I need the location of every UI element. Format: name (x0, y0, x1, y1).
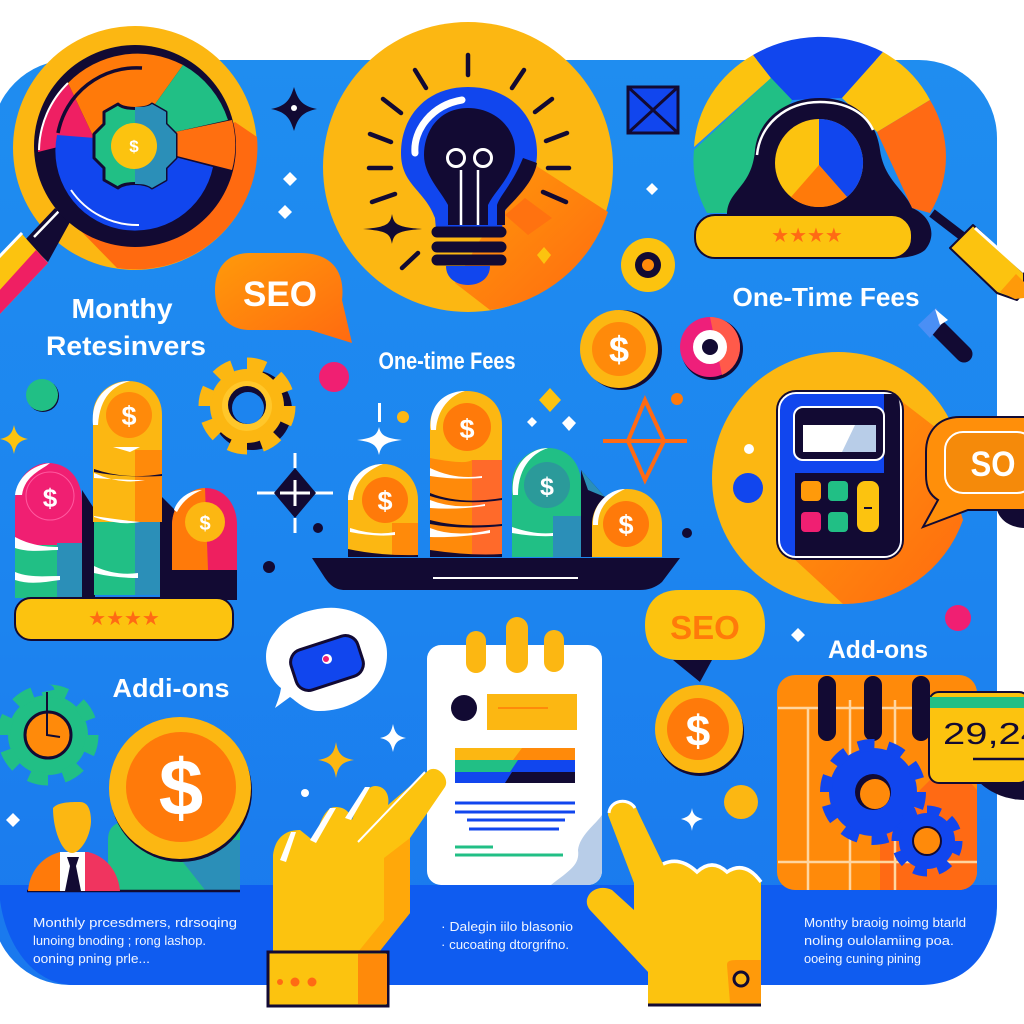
icon: crossed square (628, 87, 678, 133)
stack three (512, 448, 605, 557)
stack two (430, 391, 502, 557)
icon: coin near center (580, 310, 662, 390)
heading: Monthly Retainers: Retesinvers (46, 331, 206, 361)
bulb rays (369, 55, 569, 268)
heading: Add-ons right: Add-ons (828, 636, 928, 664)
SO bubble: SO (970, 445, 1016, 484)
text block center: · Dalegin iilo blasonio (441, 919, 573, 934)
rating bar: ★★★★ (771, 225, 843, 247)
icon: left pointing hand (268, 769, 446, 1006)
heading: One-Time Fees right: One-Time Fees (732, 282, 920, 312)
SEO bubble orange (215, 253, 352, 343)
stack two: $ (459, 414, 475, 444)
icon: sparkle dark (271, 87, 317, 131)
icon: gauge with magnifier (693, 37, 1024, 300)
text block left: Monthly prcesdmers, rdrsoqing (33, 915, 237, 930)
speech bubble with button (266, 608, 387, 711)
icon: coin under bubble: $ (686, 707, 710, 756)
text block left: lunoing bnoding ; rong lashop. (33, 933, 206, 948)
icon: light bulb circle (323, 22, 613, 312)
stack pink: $ (43, 483, 58, 513)
icon: pen (918, 308, 964, 354)
SO bubble (923, 417, 1024, 528)
icon: coin near center: $ (609, 329, 629, 370)
tray yellow with stars (15, 598, 233, 640)
text block center: · cucoating dtorgrifno. (441, 937, 569, 952)
icon: coin under bubble (655, 685, 744, 776)
tray yellow with stars: ★★★★ (88, 608, 160, 630)
sparkles around document (318, 628, 805, 831)
SEO bubble yellow (645, 590, 765, 682)
fingers at top (466, 617, 564, 673)
gears (826, 745, 958, 872)
icon: gear in lens (94, 104, 176, 188)
icon: pink target (680, 317, 743, 380)
icon: calculator circle (712, 352, 964, 604)
stack one: $ (377, 486, 393, 516)
chart: left coin stacks (15, 381, 237, 640)
heading: Monthly Retainers: Monthy (72, 293, 173, 324)
text block left: ooning pning prle... (33, 951, 150, 966)
text block right: noling oulolamiing poa. (804, 933, 954, 948)
text block right: Monthy braoig noimg btarld (804, 915, 966, 930)
stack yellow (93, 381, 162, 595)
text block center (441, 919, 573, 952)
stack four (592, 489, 662, 557)
document card (427, 617, 602, 885)
SEO bubble yellow: SEO (670, 609, 740, 646)
icon: large dollar coin: $ (159, 743, 203, 832)
chart: center coin stacks on tray (312, 391, 680, 590)
stack one (348, 464, 418, 557)
icon: bulb (401, 87, 537, 285)
icon: businessman (28, 802, 120, 891)
note card with number (929, 692, 1024, 800)
decorative dots (6, 362, 971, 827)
heading: Addi-ons left: Addi-ons (112, 673, 230, 703)
text block right (804, 915, 966, 966)
icon: small ring coin (621, 238, 675, 292)
stack three: $ (540, 473, 554, 501)
icon: calendar with gears (777, 675, 977, 890)
sparkle white group (278, 172, 658, 219)
stack red: $ (199, 513, 211, 535)
icon: gear in lens: $ (129, 137, 139, 156)
icon: right pointing hand (587, 800, 761, 1005)
heading: Monthly Retainers (46, 293, 206, 361)
stack pink (15, 463, 82, 600)
icon: green gear with clock (4, 691, 92, 779)
black tray (312, 558, 680, 590)
calculator circle dots (733, 444, 763, 503)
cuff (268, 952, 388, 1006)
SEO bubble orange: SEO (243, 275, 317, 314)
calculator (776, 390, 904, 560)
note card with number: 29,24 (943, 716, 1024, 751)
icon: yellow gear (205, 364, 292, 450)
icon: magnifier with pie chart (0, 26, 257, 316)
heading: One-time Fees center: One-time Fees (378, 348, 516, 375)
black shadows (82, 490, 237, 600)
magnifier handle (932, 213, 1024, 300)
icon: orange diamond arrow (603, 400, 687, 480)
text block right: ooeing cuning pining (804, 951, 921, 966)
sparkle yellow left (0, 425, 28, 454)
icon: dark diamond sparkle (257, 453, 333, 533)
stack red (172, 488, 237, 570)
rating bar (695, 215, 912, 258)
center sparkle (357, 388, 576, 455)
icon: large dollar coin (27, 717, 252, 891)
stack yellow: $ (121, 401, 137, 431)
stack four: $ (618, 510, 634, 540)
text block left (33, 915, 237, 966)
